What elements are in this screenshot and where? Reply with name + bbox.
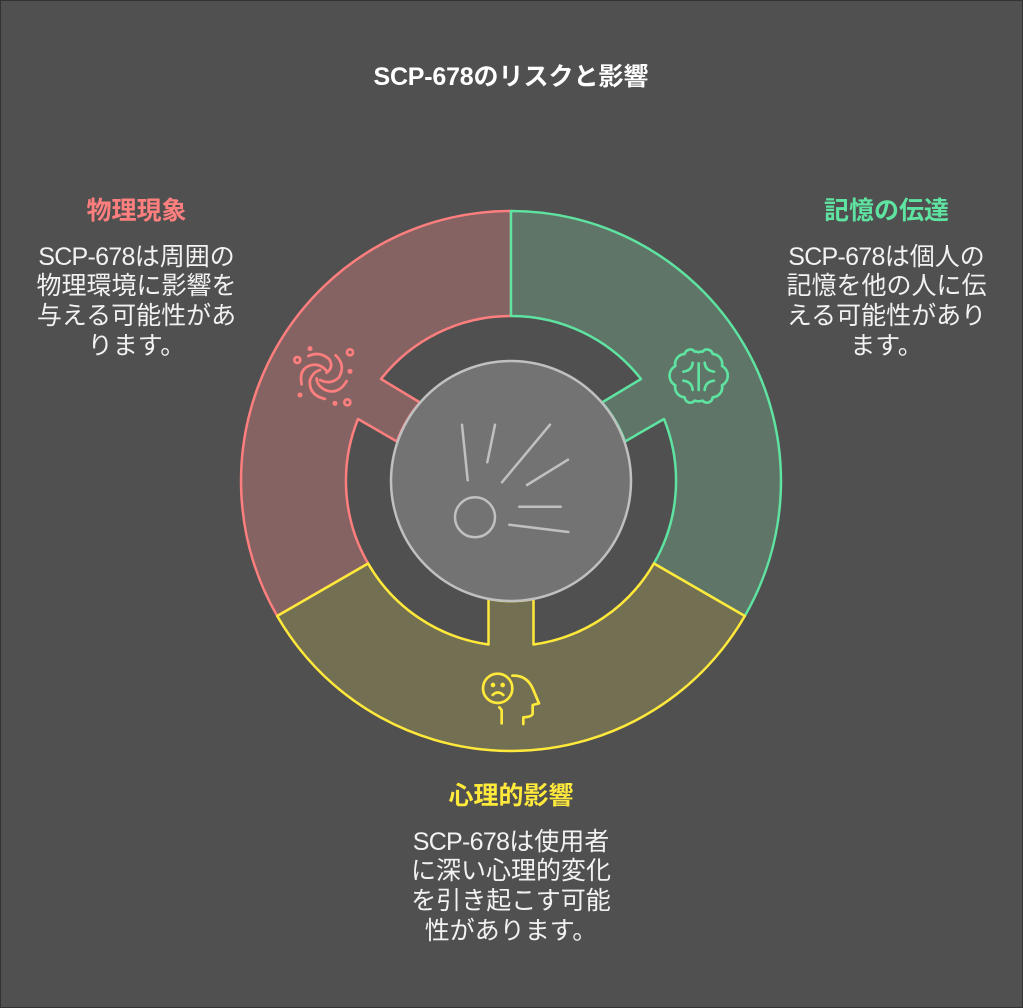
body text: SCP-678は周囲の [38,243,235,271]
body text: える可能性があり [787,302,986,330]
icon: sad face and head [483,674,539,724]
heading: 心理的影響 [448,782,574,810]
heading: 記憶の伝達 [824,197,949,225]
panel: psychological impact segment [277,564,745,751]
body text: 記憶を他の人に伝 [786,272,987,300]
label: memory transfer [786,197,987,360]
panel: physical phenomena segment [241,211,511,616]
body text: を引き起こす可能 [411,887,611,915]
icon: galaxy swirl [294,346,353,406]
panel: memory transfer segment [511,211,781,616]
body text: 物理環境に影響を [36,272,237,300]
title: SCP-678のリスクと影響 [373,63,649,91]
heading: 物理現象 [86,197,187,225]
body text: に深い心理的変化 [411,857,611,885]
center circle with impact icon [391,361,631,601]
body text: ます。 [850,332,923,360]
icon: brain [670,349,728,403]
body text: 与える可能性があ [37,302,236,330]
body text: SCP-678は個人の [788,243,985,271]
body text: SCP-678は使用者 [413,828,609,856]
body text: ります。 [88,332,185,360]
label: psychological impact [411,782,611,945]
label: physical phenomena [36,197,237,360]
icon: impact burst [455,425,568,537]
body text: 性があります。 [425,917,597,945]
